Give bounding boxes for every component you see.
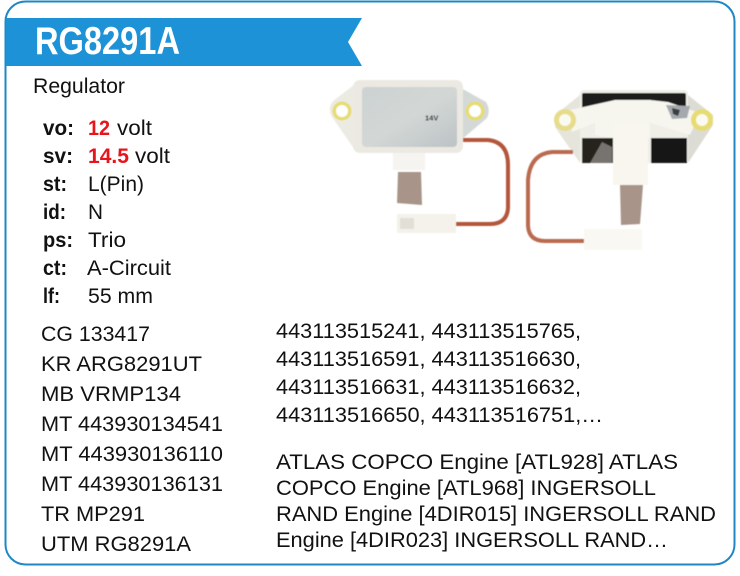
- cross references list: [41, 323, 223, 556]
- metal cover: [353, 80, 463, 153]
- OE part numbers: 443113516631, 443113516632,: [276, 376, 581, 399]
- black top band: [582, 93, 686, 107]
- cross references list: MT 443930134541: [41, 413, 223, 436]
- connector: [584, 229, 642, 250]
- spec: sv: 14.5: [88, 145, 129, 168]
- body case: [580, 90, 688, 163]
- cross references list: CG 133417: [41, 323, 150, 346]
- OE part numbers: 443113516650, 443113516751,…: [276, 404, 603, 427]
- white strip: [393, 153, 425, 170]
- spec: st: st:: [43, 173, 67, 196]
- spec: vo: [43, 117, 152, 140]
- photo: regulator front view: [330, 80, 508, 233]
- spec: ps: Trio: [88, 229, 126, 252]
- engine applications: COPCO Engine [ATL968] INGERSOLL: [276, 477, 656, 500]
- spec: lf: [43, 285, 153, 308]
- spec: id: N: [88, 201, 103, 224]
- spec: ct: A-Circuit: [87, 257, 171, 280]
- spec: vo: 12: [88, 117, 110, 140]
- cross references list: TR MP291: [41, 503, 145, 526]
- spec: vo: vo:: [43, 117, 74, 140]
- title banner: [6, 18, 362, 66]
- OE part numbers: 443113516591, 443113516630,: [276, 348, 581, 371]
- voltage stamp: 14V: [425, 114, 438, 122]
- blade terminal: [397, 172, 422, 205]
- cross references list: KR ARG8291UT: [41, 353, 202, 376]
- title: RG8291A: [35, 20, 180, 63]
- spec: ct: ct:: [43, 257, 67, 280]
- cross references list: MT 443930136131: [41, 473, 223, 496]
- white strap: [613, 123, 648, 185]
- white bracket: [570, 100, 700, 138]
- spec: lf: lf:: [43, 285, 60, 308]
- spec: sv: [43, 145, 170, 168]
- spec: st: [43, 173, 144, 196]
- spec: st: L(Pin): [88, 173, 144, 196]
- eyelets: [332, 102, 484, 120]
- blade terminal: [620, 185, 643, 225]
- cross references list: MB VRMP134: [41, 383, 181, 406]
- specifications list: [43, 117, 171, 308]
- photo: regulator back view: [528, 90, 713, 250]
- OE part numbers: [276, 320, 603, 427]
- spec: ct: [43, 257, 171, 280]
- wire: [528, 152, 584, 241]
- spec: lf: 55 mm: [88, 285, 153, 308]
- subtitle: Regulator: [33, 75, 125, 98]
- spec: vo: volt: [117, 117, 152, 140]
- left window: [582, 138, 615, 163]
- wire: [455, 140, 508, 224]
- spec: id: [43, 201, 103, 224]
- spec: sv: volt: [135, 145, 170, 168]
- engine applications: ATLAS COPCO Engine [ATL928] ATLAS: [276, 451, 678, 474]
- OE part numbers: 443113515241, 443113515765,: [276, 320, 581, 343]
- connector: [397, 214, 456, 233]
- right window: [651, 138, 687, 163]
- spec: sv: sv:: [43, 145, 73, 168]
- spec: ps: [43, 229, 126, 252]
- cross references list: MT 443930136110: [41, 443, 223, 466]
- ears: [555, 95, 580, 163]
- spec: id: id:: [43, 201, 66, 224]
- engine applications: Engine [4DIR023] INGERSOLL RAND…: [276, 529, 668, 552]
- spec: ps: ps:: [43, 229, 73, 252]
- engine applications: [276, 451, 716, 552]
- cross references list: UTM RG8291A: [41, 533, 191, 556]
- mounting ears: [330, 84, 355, 150]
- metal contact: [666, 105, 690, 119]
- eyelets: [554, 109, 713, 131]
- engine applications: RAND Engine [4DIR015] INGERSOLL RAND: [276, 503, 716, 526]
